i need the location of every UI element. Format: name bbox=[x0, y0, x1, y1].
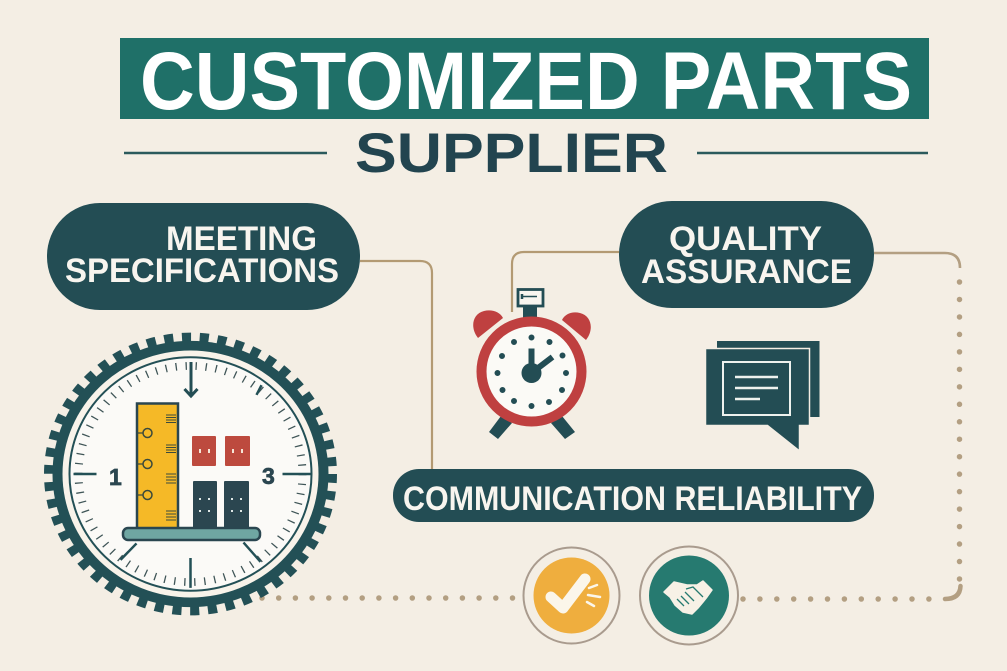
pill: communication reliability: COMMUNICATION RELIABILITY bbox=[403, 480, 862, 518]
connector corner: bottom right bbox=[945, 586, 960, 599]
dark blocks bbox=[193, 481, 249, 528]
pill: meeting specifications bbox=[47, 203, 360, 310]
pill: quality assurance bbox=[619, 201, 874, 308]
icon: chat bubbles bbox=[706, 341, 820, 451]
title text: CUSTOMIZED PARTS bbox=[140, 36, 912, 127]
icon: alarm clock bbox=[473, 290, 591, 439]
icon: gear dial with ruler and parts bbox=[50, 338, 332, 610]
dial number 3: 3 bbox=[262, 463, 275, 489]
ruler bbox=[137, 404, 178, 528]
title banner bbox=[120, 36, 929, 127]
pill: meeting specifications: MEETING bbox=[166, 220, 317, 258]
pill: communication reliability bbox=[393, 469, 874, 522]
dotted connector: gear to check badge bbox=[262, 595, 522, 601]
red blocks bbox=[192, 436, 250, 466]
subtitle text: SUPPLIER bbox=[355, 121, 668, 184]
clock legs bbox=[489, 416, 575, 439]
clock face bbox=[482, 322, 582, 422]
badge: check mark bbox=[524, 548, 620, 644]
pill: quality assurance: QUALITY bbox=[669, 220, 822, 258]
clock hands bbox=[522, 348, 552, 383]
arrow pointing down bbox=[184, 362, 198, 396]
connector: meeting specifications to communication reliability bbox=[360, 261, 432, 469]
connector: quality assurance to right side bbox=[874, 253, 960, 268]
clock markers bbox=[498, 338, 566, 406]
badge: handshake bbox=[640, 546, 738, 644]
connector: alarm clock to quality assurance bbox=[512, 252, 619, 312]
dotted connector: right side going down bbox=[957, 282, 962, 580]
clock bells bbox=[473, 310, 591, 340]
clock tag and stem bbox=[518, 290, 543, 318]
pill: quality assurance: ASSURANCE bbox=[641, 253, 852, 291]
base shelf bbox=[123, 528, 260, 540]
pill: meeting specifications: SPECIFICATIONS bbox=[65, 252, 339, 290]
dial number 1: 1 bbox=[109, 464, 122, 490]
dotted connector: along bottom to handshake bbox=[743, 596, 931, 602]
